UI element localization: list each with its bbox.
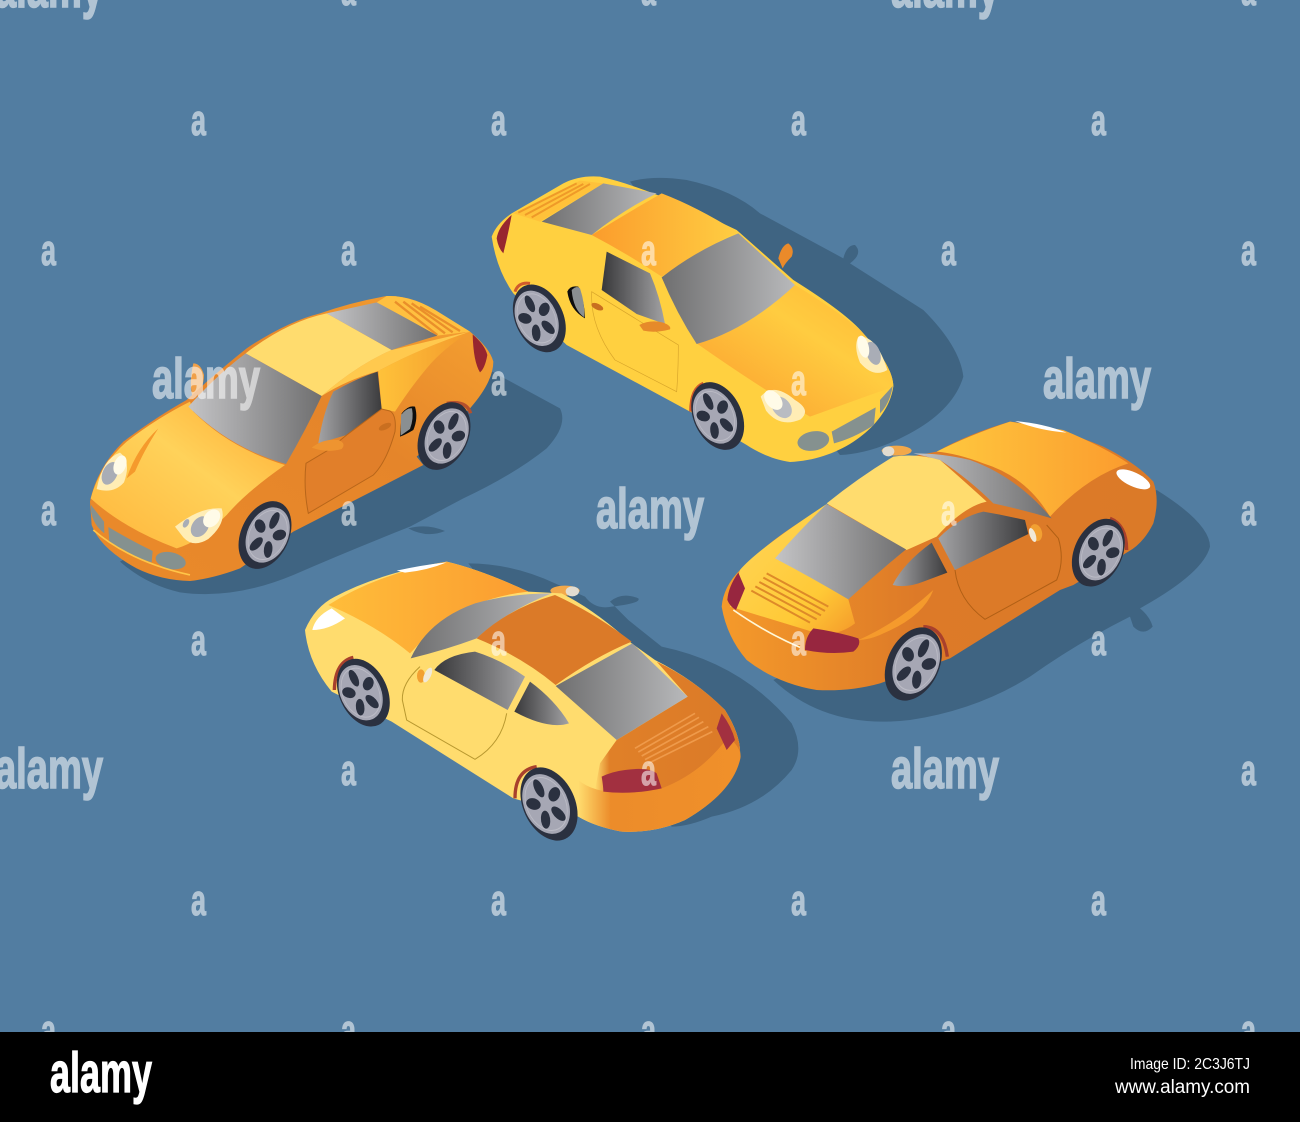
door outline [402,667,507,759]
watermark tile letters: a [341,746,356,795]
watermark tile letters: a [1241,486,1256,535]
far wing mirror [778,243,793,268]
rear deck with vents [513,181,603,222]
grille [91,505,187,572]
wing mirror [639,321,670,332]
far wing mirror [550,586,580,596]
side window [602,252,665,324]
rear deck with vents [377,296,470,336]
side air intake [567,286,585,318]
watermark tile letters: a [191,616,206,665]
door outline [955,525,1061,619]
rear flank highlight [858,590,933,640]
wheel arches [923,518,1127,657]
front wheel [327,650,400,735]
headlight left [760,387,805,422]
shadow [468,563,798,827]
watermark tile letters: a [341,486,356,535]
watermark tile letters: a [1091,96,1106,145]
watermark tile letters: a [41,486,56,535]
rear wheel [503,276,576,361]
far wing mirror [191,363,204,400]
footer bar [0,1032,1300,1122]
shadow [773,490,1210,722]
watermark tile letters: a [341,226,356,275]
rear deck with vents [730,504,855,647]
rear window [775,504,906,599]
rear wheel [509,758,589,850]
hood [91,402,285,548]
tail light [497,215,512,253]
watermark wordmarks: alamy [1043,347,1151,411]
wing mirror [417,666,434,684]
far wing mirror [882,446,912,456]
roof [477,595,632,685]
watermark tile letters: a [341,1006,356,1055]
watermark tile letters: a [191,96,206,145]
watermark tile letters: a [791,96,806,145]
tail light left [602,769,662,793]
watermark tile letters: a [491,96,506,145]
watermark tile letters: a [491,876,506,925]
side air intake [400,406,416,437]
watermark tile letters: a [641,746,656,795]
car body [492,176,893,462]
hood [697,285,893,417]
tail light right [805,628,859,653]
quarter window [893,543,947,586]
roof [592,193,737,277]
watermark tile letters: a [941,486,956,535]
watermark wordmarks: alamy [152,347,260,411]
door outline [592,292,678,392]
door window [938,512,1028,570]
door handle [378,421,392,432]
image id: Image ID: 2C3J6TJ [1130,1056,1250,1073]
door window [434,652,525,710]
side window [318,372,382,443]
watermark tile letters: a [491,616,506,665]
watermark wordmarks [0,0,1151,801]
lower bumper [578,737,741,832]
front wheel [228,493,302,577]
tail light [473,334,487,372]
wheel arches [515,283,703,412]
wing mirror [312,440,344,451]
rear wheel arch [447,403,471,413]
windshield [411,593,552,658]
rear deck with vents [595,662,740,807]
car: rear view facing upper-left [305,562,798,850]
car body [722,422,1157,690]
hood [328,562,528,653]
quarter window [514,682,569,725]
upper flank highlight [378,332,470,412]
door handle [590,301,604,312]
headlight right [175,506,224,543]
watermark tile letters: a [1091,876,1106,925]
front wheel [681,374,754,458]
wheel arches [334,657,537,798]
hood crease [127,428,158,478]
watermark tile letters: a [1241,226,1256,275]
grille [796,386,893,453]
car body [90,296,493,581]
hood highlight [1015,421,1153,493]
watermark tile letters: a [491,356,506,405]
windshield [188,353,322,464]
watermark tile letters: a [1091,616,1106,665]
watermark tile letters: a [791,616,806,665]
watermark tile letters: a [1241,746,1256,795]
shadow [630,178,963,455]
car body [305,562,740,832]
website: www.alamy.com [1114,1077,1250,1098]
rear window [542,183,657,235]
watermark tile letters: a [941,1006,956,1055]
footer logo: alamy [50,1041,152,1105]
front wheel [1062,510,1135,595]
car: top view facing lower-right [492,176,963,462]
rear window [556,643,688,740]
hood highlight [312,562,447,630]
roof [246,313,392,396]
rear window [327,302,437,350]
tail light right [717,713,735,750]
tail light left [727,573,745,610]
watermark tile letters: a [1241,1006,1256,1055]
watermark tile letters: a [791,356,806,405]
watermark tile letters: a [641,1006,656,1055]
watermark tile letters: a [41,1006,56,1055]
car: rear view facing upper-right [722,421,1210,722]
watermark tile letters: a [791,876,806,925]
fender highlight [322,332,470,396]
rear wheel [407,394,481,478]
wing mirror [1027,523,1044,543]
rear wheel [874,618,953,710]
watermark tile letters: a [941,226,956,275]
watermark tile letters: a [191,876,206,925]
bumper lip [93,530,190,575]
windshield [913,453,1052,518]
watermark wordmarks: alamy [891,737,999,801]
headlight left [97,453,129,491]
car: top view facing lower-left [90,296,562,594]
watermark tile letters: a [41,226,56,275]
watermark wordmarks: alamy [596,477,704,541]
shadow [120,365,562,594]
headlight right [855,334,887,373]
hood [937,422,1128,517]
door outline [305,409,395,513]
roof [827,456,987,550]
windshield [662,233,795,344]
watermark tile letters: a [641,226,656,275]
